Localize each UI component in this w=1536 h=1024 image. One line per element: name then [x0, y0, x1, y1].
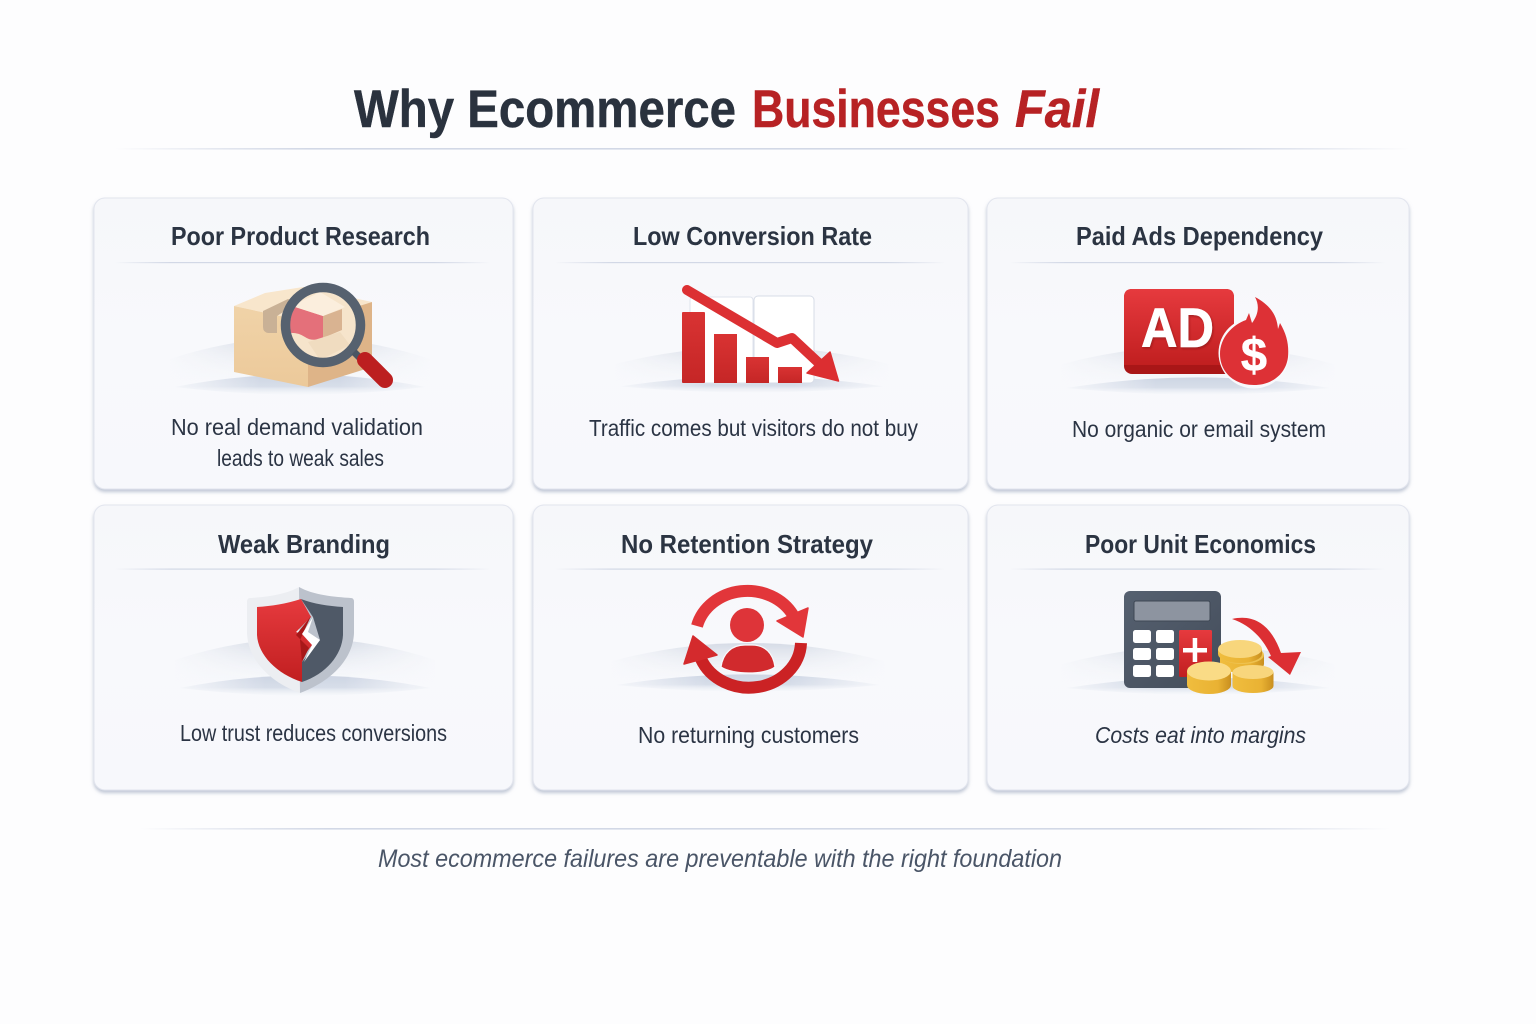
icon: customer retention cycle: [612, 591, 884, 691]
description: Traffic comes but visitors do not buy: [589, 415, 918, 441]
icon: cracked shield: [175, 587, 435, 696]
description: Low trust reduces conversions: [180, 720, 447, 746]
description: No real demand validation: [171, 414, 423, 440]
heading: poor product research: Poor Product Research: [171, 221, 430, 251]
title: Fail: [1015, 80, 1100, 139]
title: Businesses: [752, 80, 1000, 139]
description: No returning customers: [638, 722, 859, 748]
icon: falling bar chart: [616, 290, 888, 392]
description: leads to weak sales: [217, 445, 384, 471]
footer takeaway: Most ecommerce failures are preventable with the right foundation: [378, 845, 1062, 873]
panel: no retention strategy: [533, 505, 968, 790]
panel: paid ads dependency: [987, 198, 1409, 489]
description: Costs eat into margins: [1095, 722, 1306, 748]
panel: poor product research: [94, 198, 513, 489]
panel: weak branding: [94, 505, 513, 790]
infographic: [92, 88, 1412, 872]
panel: poor unit economics: [987, 505, 1409, 790]
icon: burning ad budget: AD: [1141, 296, 1214, 359]
icon: calculator, coins and falling arrow: [1062, 591, 1334, 694]
heading: weak branding: Weak Branding: [218, 529, 390, 559]
icon: box under magnifying glass: [187, 282, 413, 392]
description: [171, 414, 423, 471]
description: No organic or email system: [1072, 416, 1326, 442]
heading: paid ads dependency: Paid Ads Dependency: [1076, 221, 1323, 251]
heading: low conversion rate: Low Conversion Rate: [633, 221, 872, 251]
title: [354, 80, 1100, 139]
icon: burning ad budget: [1062, 289, 1334, 394]
panel: low conversion rate: [533, 198, 968, 489]
heading: no retention strategy: No Retention Strategy: [621, 529, 873, 559]
icon: burning ad budget: $: [1241, 328, 1267, 381]
title: Why Ecommerce: [354, 80, 736, 139]
heading: poor unit economics: Poor Unit Economics: [1085, 529, 1316, 559]
